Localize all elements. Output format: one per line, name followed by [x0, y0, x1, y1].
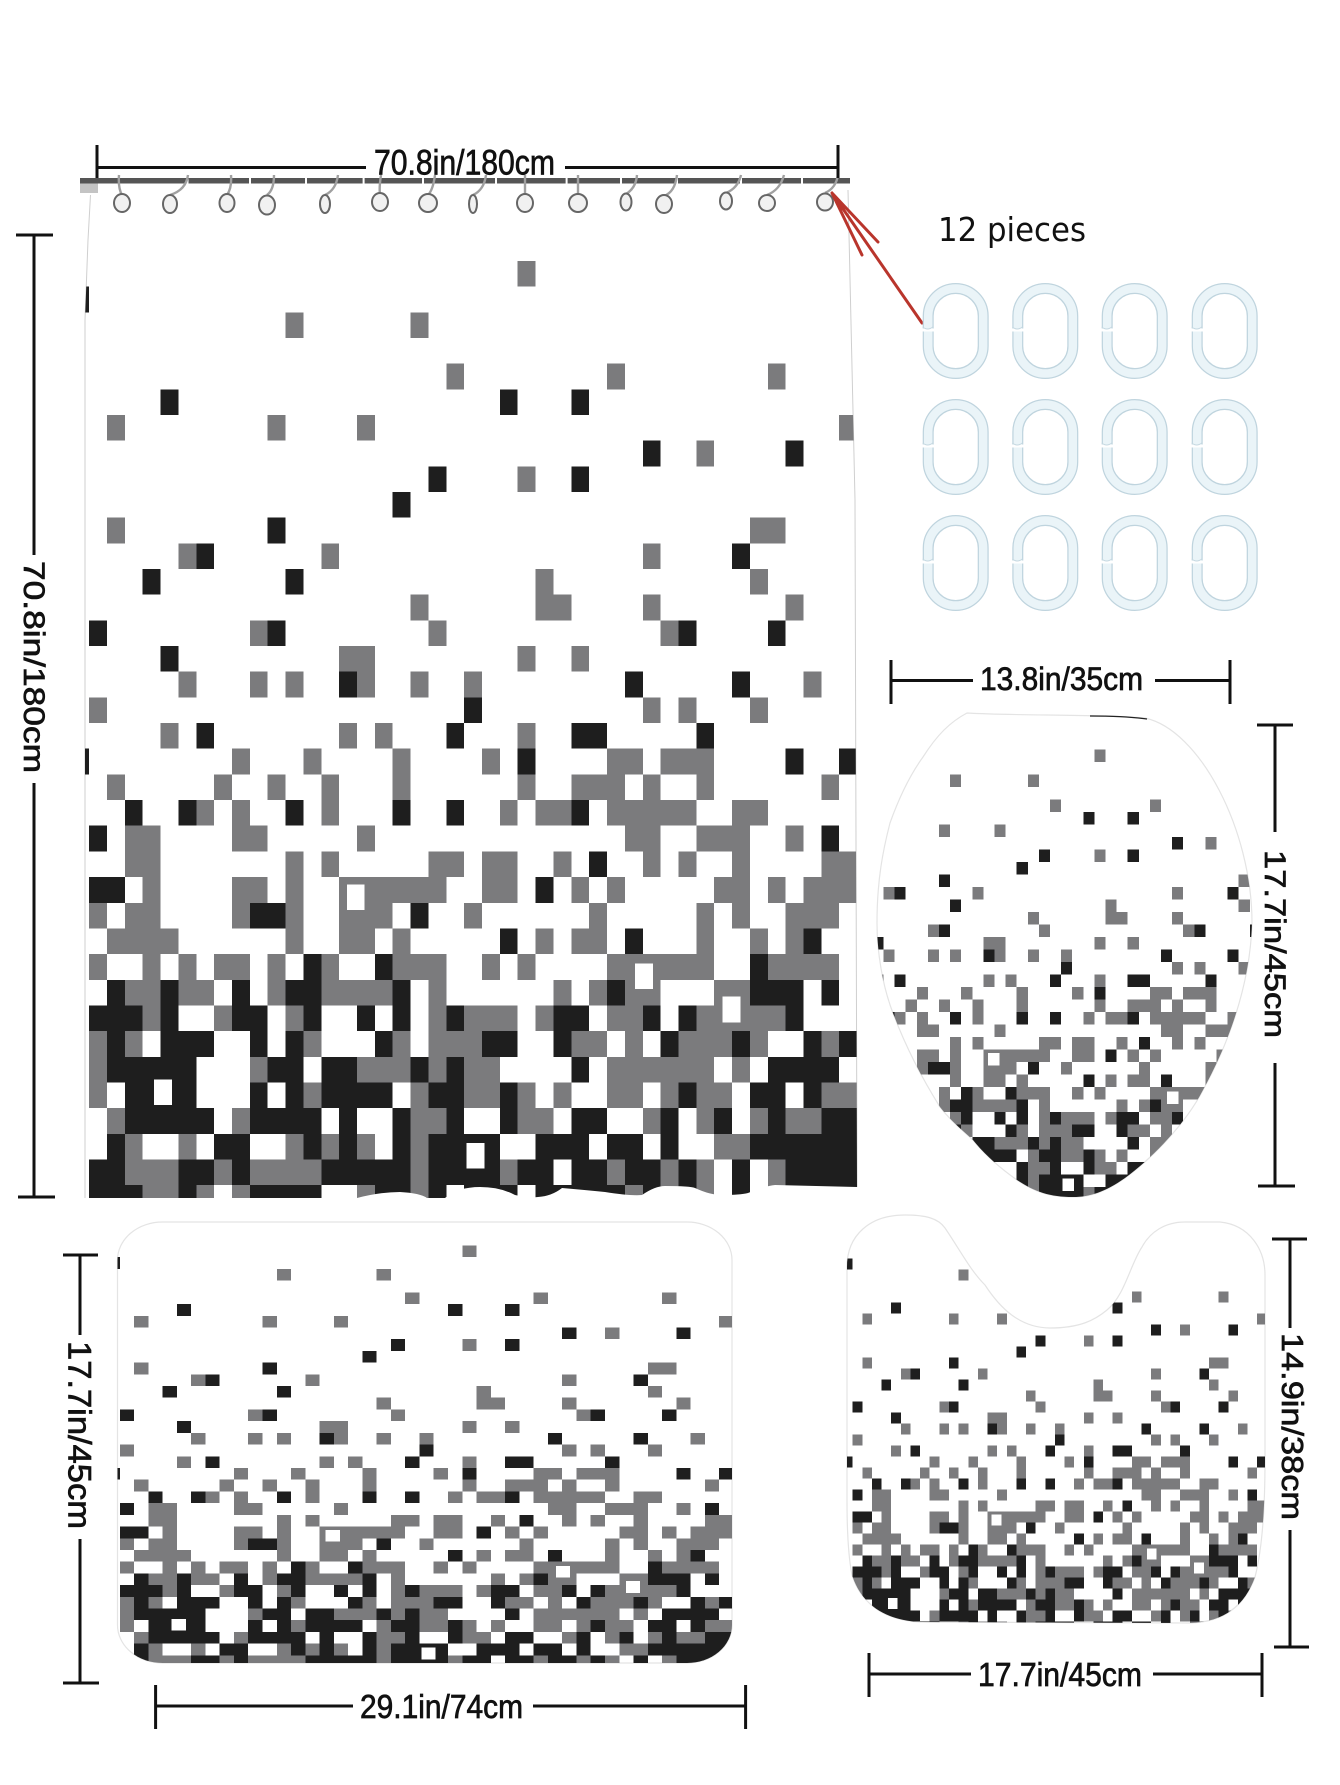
dimension: bath mat height — [62, 1255, 99, 1683]
panel: twelve hook rings — [922, 288, 1252, 606]
panel: toilet lid cover — [876, 712, 1252, 1198]
dimension: curtain height — [16, 235, 55, 1197]
dimension: contour mat width — [869, 1653, 1262, 1697]
lid pixel pattern — [877, 750, 1252, 1197]
panel: shower curtain — [71, 190, 857, 1211]
dimension: bath mat width — [156, 1685, 746, 1729]
curtain pixel pattern — [71, 261, 857, 1211]
curtain rod — [80, 176, 850, 193]
dimension: lid cover width — [891, 660, 1230, 704]
dimension: lid cover height — [1257, 725, 1295, 1186]
label: ring count: 12 pieces — [938, 210, 1086, 249]
label: bath mat width: 29.1in/74cm — [360, 1688, 523, 1725]
label: lid cover height: 17.7in/45cm — [1258, 850, 1291, 1038]
panel: contour mat — [843, 1215, 1267, 1654]
label: lid cover width: 13.8in/35cm — [980, 661, 1143, 697]
bath mat pixel pattern — [106, 1246, 733, 1679]
curtain hooks and rings — [114, 175, 838, 214]
contour mat pixel pattern — [847, 1258, 1265, 1623]
label: curtain width: 70.8in/180cm — [374, 144, 555, 182]
dimension: contour mat height — [1272, 1239, 1310, 1647]
label: bath mat height: 17.7in/45cm — [62, 1341, 98, 1529]
red arrow to hook rings — [832, 193, 922, 323]
label: contour mat height: 14.9in/38cm — [1275, 1333, 1310, 1520]
panel: bath mat — [106, 1222, 733, 1679]
label: curtain height: 70.8in/180cm — [17, 561, 50, 773]
dimension: curtain width — [97, 144, 838, 182]
label: contour mat width: 17.7in/45cm — [978, 1656, 1142, 1693]
